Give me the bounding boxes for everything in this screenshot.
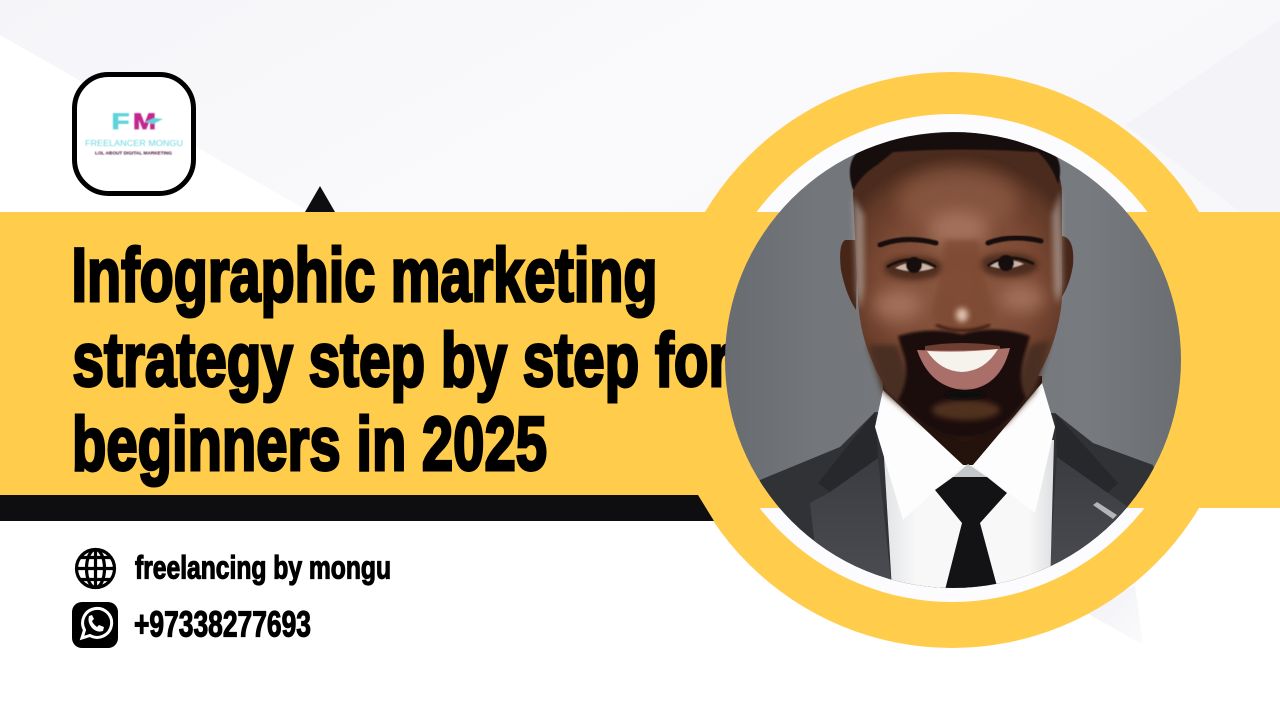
logo tagline: LOL ABOUT DIGITAL MARKETING bbox=[95, 150, 173, 156]
shirt collar bbox=[875, 383, 1055, 520]
title bbox=[72, 233, 730, 487]
eye sockets bbox=[884, 253, 1038, 280]
tie knot backing bbox=[953, 464, 987, 477]
suit jacket bbox=[760, 412, 1154, 588]
logo monogram: M bbox=[133, 109, 156, 134]
beard bbox=[898, 329, 1030, 438]
phone number: +97338277693 bbox=[134, 604, 311, 644]
title: beginners in 2025 bbox=[72, 402, 547, 487]
jaw stubble bbox=[868, 340, 1050, 438]
smile teeth bbox=[927, 349, 998, 372]
logo monogram bbox=[112, 109, 163, 134]
eyes bbox=[887, 255, 1034, 273]
logo name: FREELANCER MONGU bbox=[85, 139, 183, 148]
lips bbox=[917, 348, 1010, 390]
cheek highlights bbox=[874, 212, 1044, 321]
chin stubble bbox=[932, 400, 1000, 420]
white shirt bbox=[883, 440, 1054, 590]
title: strategy step by step for bbox=[72, 318, 730, 403]
upper lip bbox=[925, 343, 1000, 351]
ears bbox=[840, 236, 1073, 310]
footer contact: website bbox=[76, 550, 391, 588]
temple fades bbox=[853, 190, 1063, 310]
face bbox=[853, 140, 1062, 435]
icon: whatsapp bbox=[72, 602, 118, 648]
nose bbox=[932, 240, 995, 331]
hair bbox=[850, 132, 1060, 190]
eyebrows bbox=[880, 238, 1041, 245]
black strip under band bbox=[0, 495, 714, 521]
black triangle accent bbox=[305, 186, 335, 212]
title: Infographic marketing bbox=[72, 233, 658, 318]
footer contact: phone bbox=[72, 602, 311, 648]
yellow title band bbox=[0, 212, 1280, 508]
portrait photo bbox=[725, 132, 1190, 600]
neck bbox=[883, 376, 1042, 465]
yellow ring behind portrait bbox=[664, 72, 1240, 648]
logo monogram: F bbox=[112, 109, 130, 134]
logo badge bbox=[74, 74, 194, 194]
jacket lapels bbox=[818, 412, 1118, 493]
forehead highlight bbox=[898, 170, 1018, 230]
website label: freelancing by mongu bbox=[135, 550, 391, 586]
icon: globe bbox=[76, 550, 114, 588]
soul patch bbox=[945, 390, 985, 400]
lapel pin bbox=[1093, 502, 1117, 519]
jacket front panels bbox=[810, 458, 1128, 580]
black tie bbox=[935, 477, 1007, 590]
